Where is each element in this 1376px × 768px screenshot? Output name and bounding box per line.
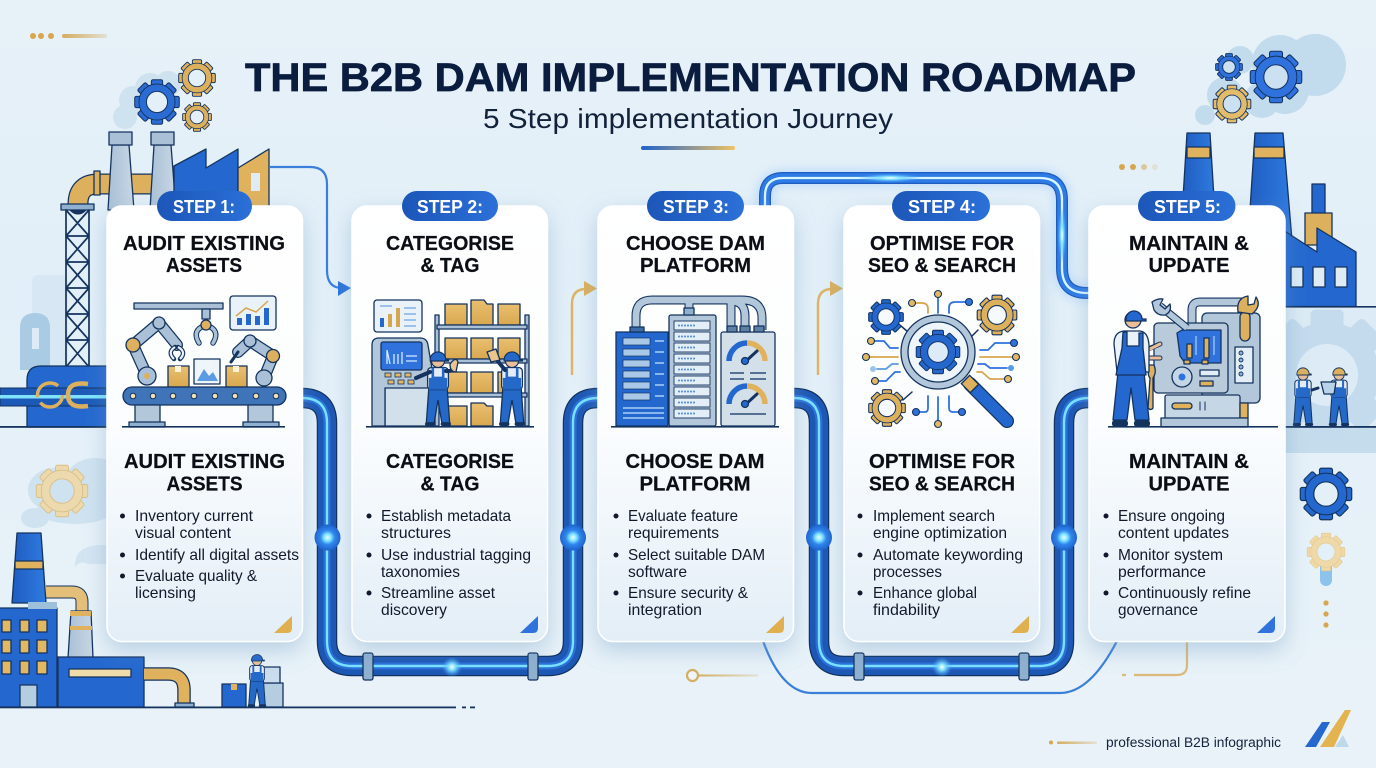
subheading: optimise for seo and search [869,450,1015,496]
badge: step 1 [157,191,252,221]
pipeline: steps 1 to 3 [296,398,604,680]
heading: optimise for seo and search: OPTIMISE FOR [870,232,1014,255]
bullet list: software [628,564,687,581]
heading: choose dam platform [626,232,765,277]
bullet list: Select suitable DAM [628,547,765,564]
panel: step 4 [844,191,1040,642]
bullet list: integration [628,602,702,619]
badge: step 2 [402,191,498,221]
bullet list: Ensure security & [628,585,748,602]
heading: audit existing assets [123,232,285,277]
badge: step 5 [1138,191,1236,221]
illustration: magnifier with gears and circuit lines [862,290,1020,428]
illustration: servers, pipes and gauges [611,298,779,428]
connector: gold arrow step 3 to 4 [818,281,843,375]
connector: gold line under step 5 [1122,641,1187,675]
bullet list: Continuously refine [1118,585,1251,602]
subheading: categorise and tag: & TAG [420,472,480,496]
bullet list: visual content [135,525,232,542]
title: THE B2B DAM IMPLEMENTATION ROADMAP [245,56,1136,100]
bullet list: Streamline asset [381,585,496,602]
illustration: technician repairing machine [1108,296,1278,428]
bullet list: Implement search [873,508,995,525]
heading: categorise and tag: CATEGORISE [386,232,514,255]
bullet list: governance [1118,602,1198,619]
connector: gold node line [687,670,758,681]
badge: step 4: STEP 4: [908,197,976,217]
subheading: categorise and tag [386,450,514,496]
bullet list: requirements [628,525,719,542]
illustration: left factory [0,132,269,428]
badge: step 3: STEP 3: [663,197,729,217]
title underline [641,146,735,150]
subheading: maintain and update [1129,450,1249,496]
subtitle: 5 Step implementation Journey [483,103,893,134]
connector: gold arrow step 2 to 3 [572,281,597,375]
heading: maintain and update: UPDATE [1148,254,1230,277]
bullet list: Enhance global [873,585,977,602]
bullet list: Establish metadata [381,508,511,525]
bullet list: Identify all digital assets [135,547,299,564]
bullet list [858,508,1023,619]
bullet list: performance [1118,564,1206,581]
panel: step 1 [107,191,302,642]
footer note: professional B2B infographic [1106,735,1281,750]
decorative dots top left [30,33,107,39]
illustration: warehouse shelves and workers [366,300,534,428]
corner mark [1011,616,1029,633]
illustration: pale gear and cloud bottom left [21,458,125,567]
bullet list: Evaluate feature [628,508,738,525]
subheading: choose dam platform: PLATFORM [640,472,750,496]
heading: optimise for seo and search [868,232,1016,277]
heading: optimise for seo and search: SEO & SEARCH [868,254,1016,277]
badge: step 3 [647,191,744,221]
bullet list: Evaluate quality & [135,568,257,585]
bullet list: content updates [1118,525,1229,542]
heading: audit existing assets: AUDIT EXISTING [123,232,285,255]
bullet list: Monitor system [1118,547,1223,564]
bullet list: discovery [381,602,447,619]
illustration: right gears and smoke [1195,34,1346,125]
badge: step 2: STEP 2: [417,197,483,217]
logo mark [1305,710,1351,747]
illustration: right side gears [1300,468,1352,628]
bullet list: Ensure ongoing [1118,508,1225,525]
subheading: choose dam platform [626,450,764,496]
panel: step 3 [598,191,794,642]
bullet list: Inventory current [135,508,254,525]
bullet list: engine optimization [873,525,1007,542]
heading: choose dam platform: PLATFORM [640,254,751,277]
subheading: maintain and update: UPDATE [1148,472,1230,496]
subheading: optimise for seo and search: SEO & SEARCH [869,472,1015,496]
connector: thin blue arrow step 1 to 2 [270,167,351,296]
heading: categorise and tag [386,232,514,277]
illustration: right factory [1182,133,1376,453]
heading: audit existing assets: ASSETS [166,254,242,277]
subheading: audit existing assets [124,450,285,496]
bullet list: Automate keywording [873,547,1023,564]
bullet list: structures [381,525,451,542]
corner mark [766,616,784,633]
pipeline: steps 3 to 5 [788,398,1095,680]
illustration: factory bottom left [0,533,475,708]
subheading: optimise for seo and search: OPTIMISE FOR [869,450,1015,473]
illustration: robot arms on conveyor [122,296,286,428]
bullet list [614,508,765,619]
corner mark [520,616,538,633]
illustration: top-left gears and smoke [113,60,215,131]
bullet list: findability [873,602,940,619]
connector: glowing top pipe [765,174,1095,293]
subheading: choose dam platform: CHOOSE DAM [626,450,764,473]
panel: step 5 [1089,191,1285,642]
heading: choose dam platform: CHOOSE DAM [626,232,765,255]
bullet list: processes [873,564,942,581]
badge: step 4 [892,191,990,221]
bullet list: Use industrial tagging [381,547,531,564]
bullet list: taxonomies [381,564,460,581]
subheading: maintain and update: MAINTAIN & [1129,450,1249,473]
subheading: categorise and tag: CATEGORISE [386,450,514,473]
heading: maintain and update: MAINTAIN & [1129,232,1249,255]
heading: maintain and update [1129,232,1249,277]
connector: thin blue curve under step 4 [763,641,1117,693]
panel: step 2 [352,191,548,642]
bullet list [366,508,531,619]
decorative dots top right [1119,164,1158,170]
illustration: two engineers right [1293,368,1349,426]
bullet list [120,508,299,602]
heading: categorise and tag: & TAG [420,254,480,277]
badge: step 5: STEP 5: [1154,197,1221,217]
subheading: audit existing assets: AUDIT EXISTING [124,450,285,473]
badge: step 1: STEP 1: [173,197,235,217]
corner mark [274,616,292,633]
bullet list: licensing [135,585,196,602]
subheading: audit existing assets: ASSETS [166,472,242,496]
corner mark [1257,616,1275,633]
bullet list [1104,508,1251,619]
